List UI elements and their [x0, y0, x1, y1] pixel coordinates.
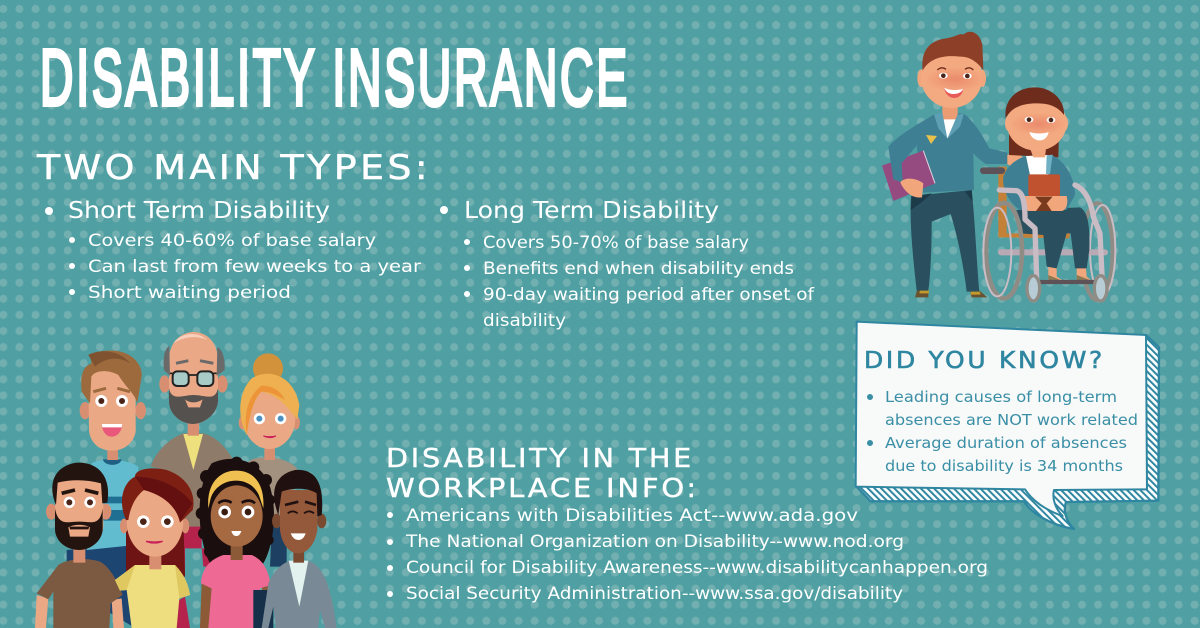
- panel: long term disability: Long Term Disability: [464, 198, 719, 224]
- man: [882, 32, 1027, 297]
- panel: short term disability: Can last from few weeks to a year: [88, 257, 421, 277]
- purple book: [882, 151, 935, 201]
- panel: long term disability: [440, 198, 815, 331]
- callout: did you know speech bubble: due to disability is 34 months: [885, 457, 1123, 475]
- panel: short term disability: Covers 40-60% of base salary: [88, 231, 376, 251]
- callout: did you know speech bubble: absences are NOT work related: [885, 411, 1138, 429]
- panel: disability in the workplace info: [386, 444, 988, 604]
- panel: short term disability: Short waiting period: [88, 283, 291, 303]
- panel: disability in the workplace info: The National Organization on Disability--www.nod.org: [405, 532, 904, 552]
- heading: two main types: TWO MAIN TYPES:: [36, 148, 431, 188]
- woman in wheelchair: [1003, 87, 1092, 281]
- front figure: smiling man in gray cardigan: [253, 470, 337, 628]
- panel: disability in the workplace info: DISABILITY IN THE: [386, 444, 694, 474]
- back figure: bald man with glasses: [151, 332, 233, 577]
- wheelchair frame and front wheels: [983, 185, 1107, 301]
- illustration: group of seven diverse people: [35, 332, 337, 628]
- front figure: bearded man in brown shirt: [35, 463, 124, 628]
- panel: disability in the workplace info: Americans with Disabilities Act--www.ada.gov: [406, 506, 858, 526]
- callout: did you know speech bubble: [856, 322, 1159, 529]
- front figure: curly haired woman in pink top: [196, 457, 276, 628]
- panel: disability in the workplace info: Council for Disability Awareness--www.disabilitycanhappen.org: [406, 558, 988, 578]
- panel: long term disability: disability: [483, 311, 566, 331]
- panel: long term disability: 90-day waiting period after onset of: [483, 285, 815, 305]
- title: DISABILITY INSURANCE: [40, 33, 630, 122]
- illustration: man with book beside woman in wheelchair: [882, 32, 1115, 301]
- panel: long term disability: Covers 50-70% of base salary: [483, 233, 749, 253]
- panel: long term disability: Benefits end when disability ends: [483, 259, 794, 279]
- panel: disability in the workplace info: Social Security Administration--www.ssa.gov/disability: [406, 584, 903, 604]
- wheelchair back wheel and backrest: [983, 167, 1115, 300]
- callout: did you know speech bubble: Average duration of absences: [885, 434, 1127, 452]
- callout: did you know speech bubble: Leading causes of long-term: [885, 388, 1117, 406]
- back figure: blonde woman with bun: [239, 353, 300, 567]
- callout: did you know speech bubble: DID YOU KNOW?: [864, 348, 1105, 374]
- back figure: young man in striped shirt: [67, 351, 146, 628]
- panel: disability in the workplace info: WORKPLACE INFO:: [386, 474, 699, 504]
- front figure: red-haired woman in yellow top: [115, 468, 194, 628]
- panel: short term disability: [45, 198, 421, 303]
- panel: short term disability: Short Term Disability: [68, 198, 330, 224]
